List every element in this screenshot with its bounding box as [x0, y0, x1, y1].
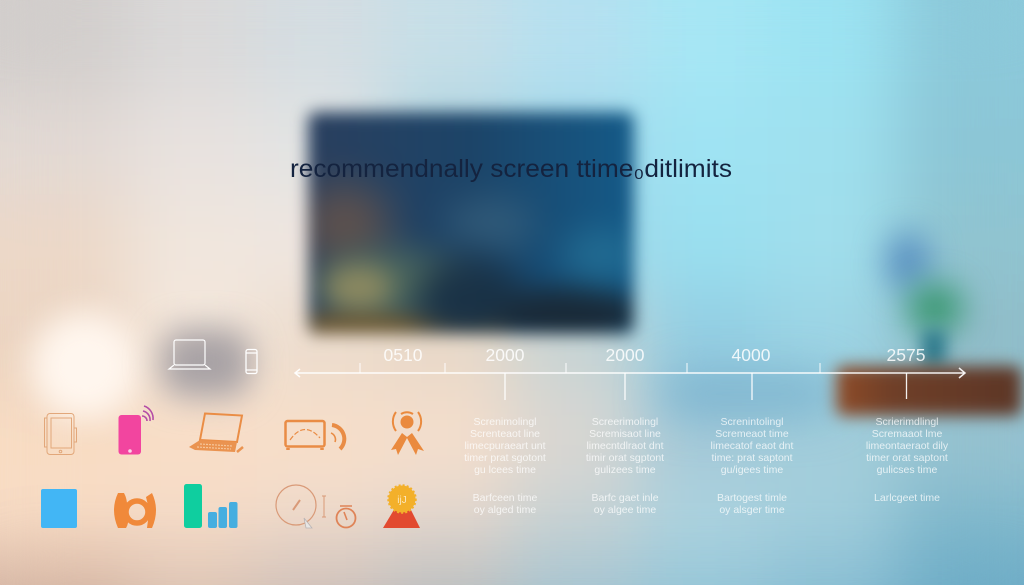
column text 4: Scremaaot lme	[872, 428, 942, 440]
icon: award ribbon	[391, 412, 424, 455]
column text 2: timir orat sgptont	[586, 452, 664, 464]
column text 1: gu lcees time	[474, 464, 536, 476]
year labels: 2000	[486, 345, 525, 365]
icon: clock and stopwatch	[276, 485, 356, 528]
column text 4: timer orat saptont	[866, 452, 948, 464]
column text 1	[464, 416, 546, 516]
column text 1: Screnimolingl	[473, 416, 537, 428]
icon: gold badge: ijJ	[397, 495, 407, 506]
column text 3: Bartogest timle	[717, 492, 787, 504]
column text 3: Scremeaot time	[715, 428, 789, 440]
timeline	[295, 363, 965, 400]
icon: orange alarm	[114, 493, 156, 528]
column text 4: gulicses time	[877, 464, 937, 476]
column text 2: gulizees time	[594, 464, 656, 476]
column text 3: Screnintolingl	[720, 416, 784, 428]
icon: white phone	[246, 350, 257, 374]
column text 4: Larlcgeet time	[874, 492, 940, 504]
icon: white laptop	[169, 340, 210, 369]
title: recommendnally screen ttime₀ditlimits	[290, 155, 732, 183]
icon: blue square	[41, 489, 77, 528]
year labels: 0510	[384, 345, 423, 365]
column text 4	[866, 416, 949, 504]
column text 2: limecntdlraot dnt	[586, 440, 664, 452]
column text 2: Barfc gaet inle	[591, 492, 659, 504]
icon: orange laptop	[189, 414, 243, 452]
column text 1: Barfceen time	[473, 492, 538, 504]
icon: pink phone with signal	[118, 406, 153, 454]
column text 3: limecatof eaot dnt	[711, 440, 794, 452]
year labels: 4000	[732, 345, 771, 365]
icon: outlined tablet	[44, 414, 76, 454]
column text 3: gu/igees time	[721, 464, 783, 476]
column text 1: limecpuraeart unt	[464, 440, 546, 452]
icon: gauge with arrow	[286, 421, 344, 450]
year labels: 2000	[606, 345, 645, 365]
icon: green phone with bars	[184, 484, 238, 528]
icon: gold badge	[383, 486, 420, 528]
column text 3: time: prat saptont	[711, 452, 793, 464]
column text 1: oy alged time	[474, 504, 536, 516]
year labels	[384, 345, 925, 365]
column text 2: Scremisaot line	[589, 428, 661, 440]
column text 4: Scrierimdlingl	[875, 416, 939, 428]
column text 2: oy algee time	[594, 504, 656, 516]
column text 1: Screnteaot line	[470, 428, 540, 440]
column text 4: limeontaeraot dily	[866, 440, 949, 452]
column text 3: oy alsger time	[719, 504, 785, 516]
column text 3	[711, 416, 794, 516]
year labels: 2575	[887, 345, 925, 365]
column text 2	[586, 416, 664, 516]
column text 1: timer prat sgotont	[464, 452, 546, 464]
column text 2: Screerimolingl	[592, 416, 658, 428]
